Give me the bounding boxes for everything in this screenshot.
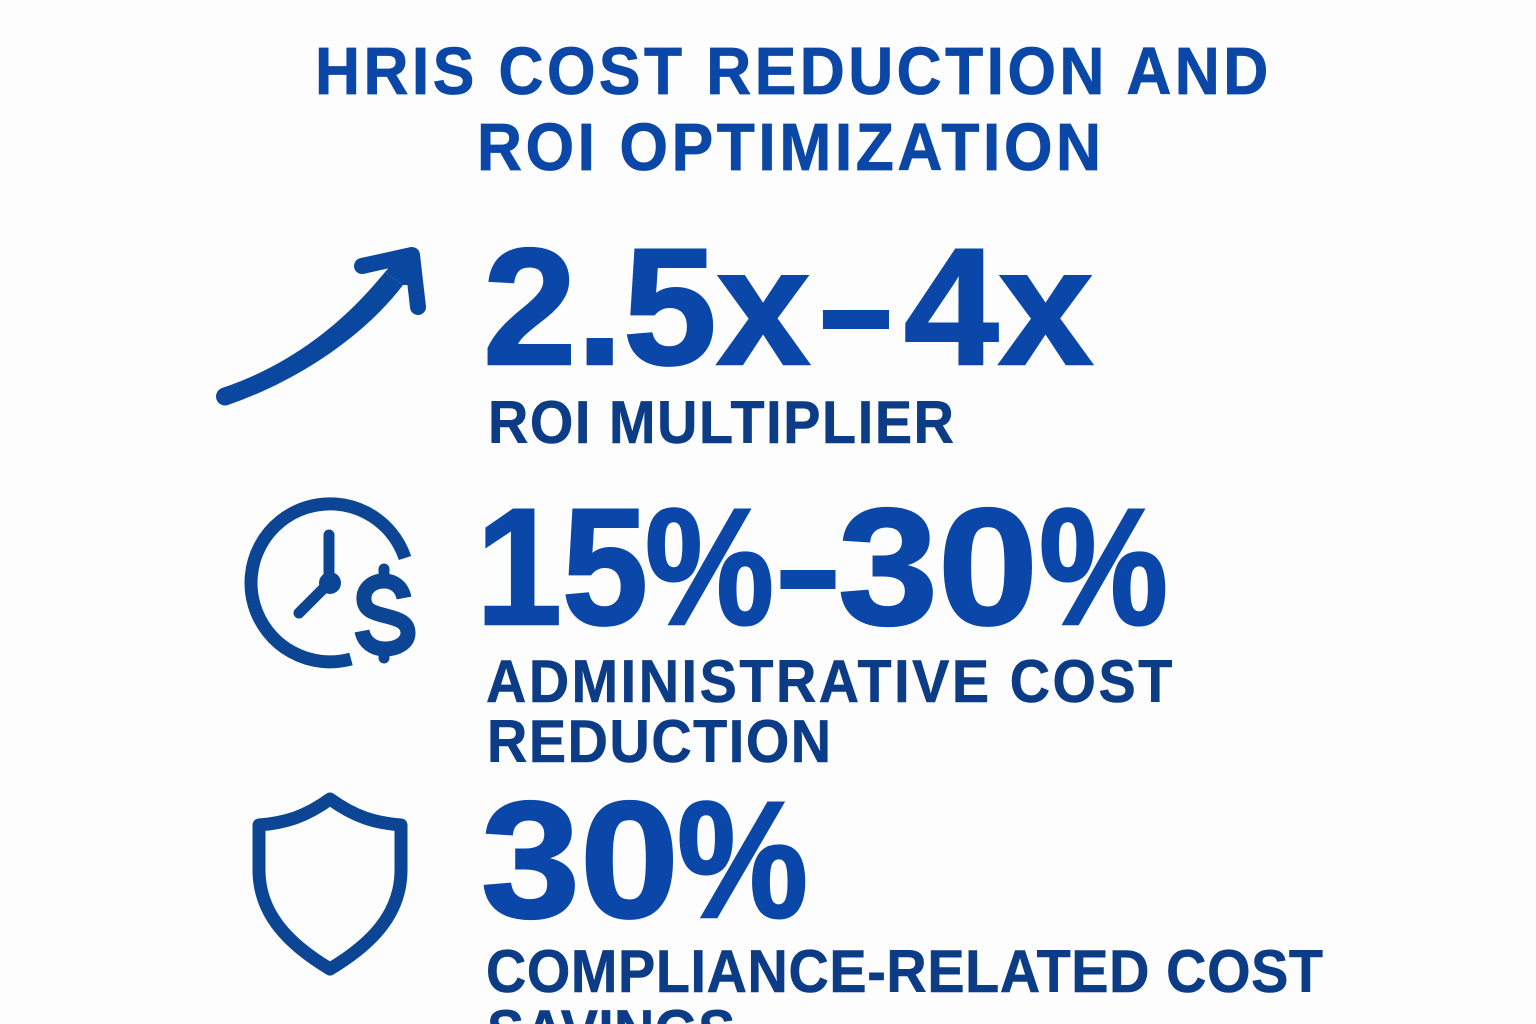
panel: compliance-related cost savings [259,768,1323,1024]
stat: 30%: % [677,768,808,953]
stat: 15%–30%: 30 [838,475,1038,660]
icon: clock with dollar sign [251,504,408,662]
stat: 15%–30%: % [1039,475,1168,660]
title: ROI OPTIMIZATION [477,109,1101,184]
panel: administrative cost reduction [251,475,1172,775]
stat: 2.5x–4x [483,215,1093,400]
stat: 30% [481,768,808,953]
stat: 2.5x–4x: – [820,215,892,400]
label: compliance-related cost savings: COMPLIANCE-RELATED COST [486,939,1323,1005]
stat: 15%–30% [476,475,1168,660]
stat: 15%–30%: 15 [476,475,648,660]
label: ROI multiplier: ROI MULTIPLIER [488,390,954,456]
label: administrative cost reduction: REDUCTION [487,709,831,775]
stat: 2.5x–4x: 2.5x [483,215,810,400]
icon: shield [259,799,401,969]
stat: 15%–30%: – [778,475,838,660]
stat: 30%: 30 [481,768,679,953]
stat: 2.5x–4x: 4x [904,215,1093,400]
icon: rising arrow [216,250,418,406]
title: HRIS COST REDUCTION AND [315,33,1268,108]
panel: ROI multiplier [216,215,1093,456]
label: administrative cost reduction [486,649,1172,775]
label: administrative cost reduction: ADMINISTRATIVE COST [486,649,1172,715]
stat: 15%–30%: % [645,475,774,660]
title [315,33,1268,184]
